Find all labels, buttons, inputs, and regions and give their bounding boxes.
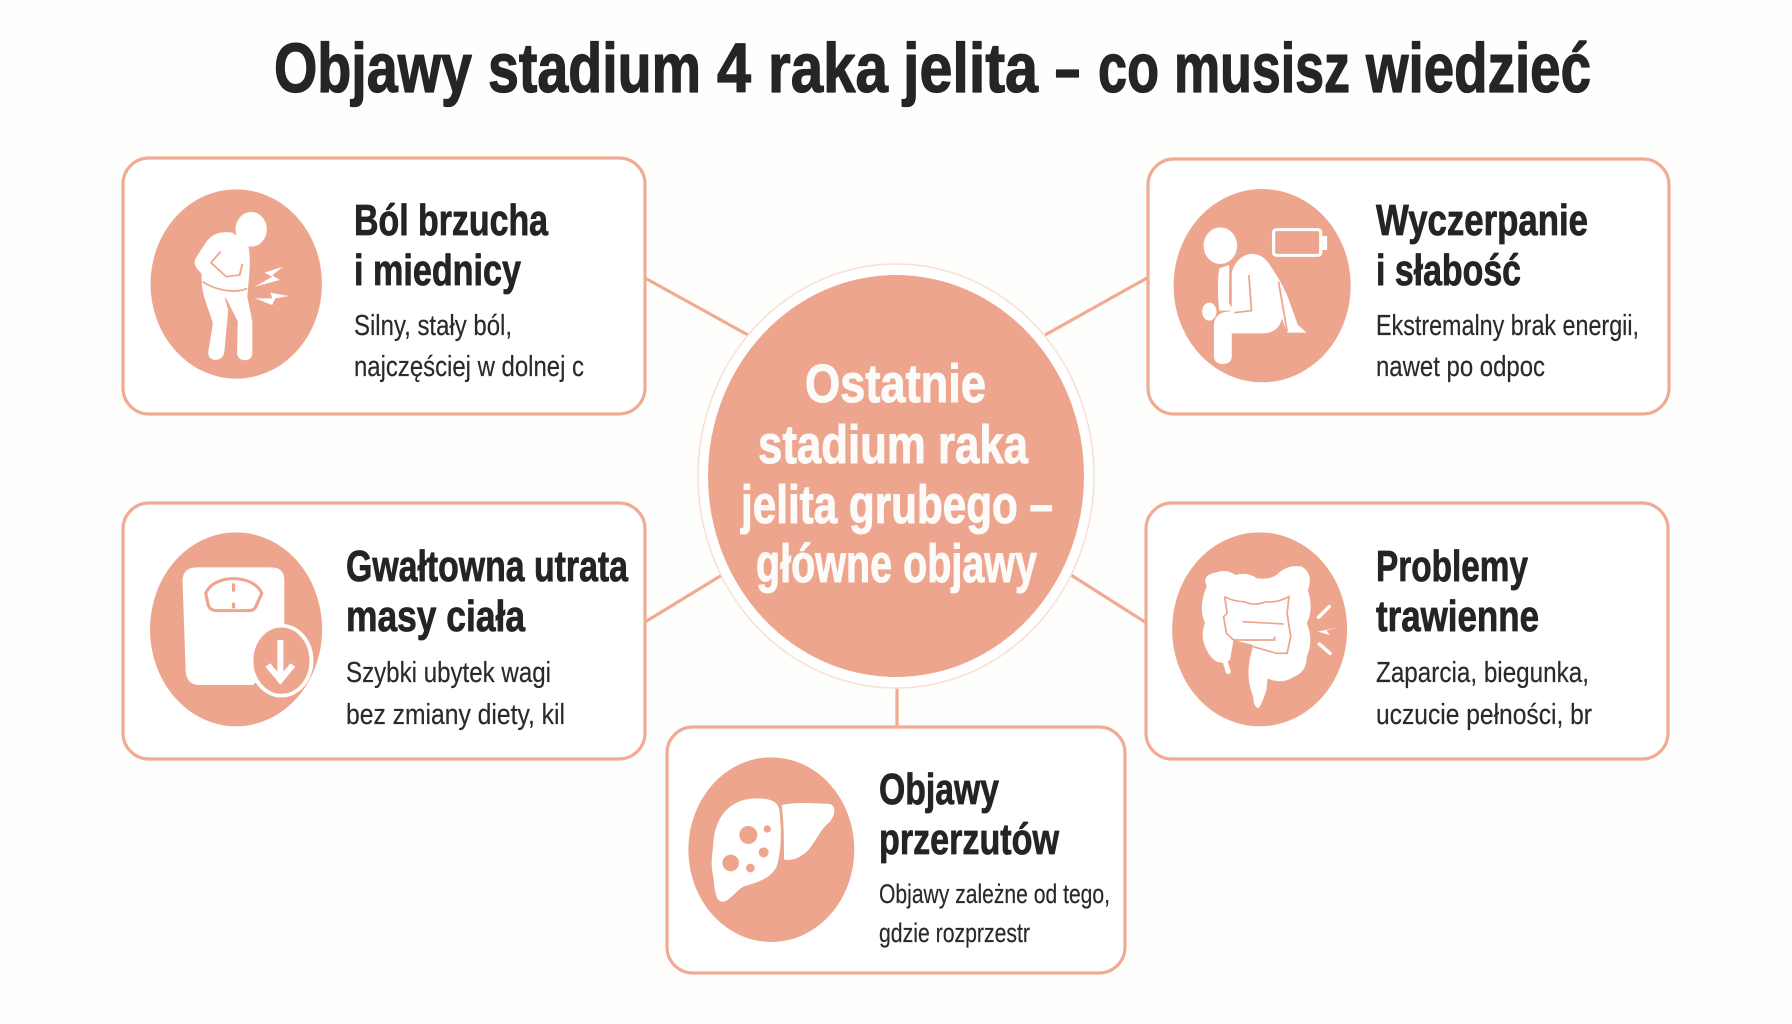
panel: digestive problems — [1146, 503, 1668, 759]
panel: rapid weight loss: bez zmiany diety, kil — [346, 699, 565, 731]
connectors between center circle and cards — [645, 278, 1147, 727]
title: – — [1055, 29, 1080, 107]
panel: abdominal and pelvic pain: i miednicy — [354, 246, 521, 295]
panel: digestive problems: uczucie pełności, br — [1376, 699, 1592, 731]
heading: Ból brzucha — [354, 196, 548, 245]
center circle: główne objawy — [756, 534, 1037, 594]
panel: abdominal and pelvic pain: najczęściej w dolnej c — [354, 351, 584, 383]
title: 4 — [717, 29, 751, 107]
title: co — [1098, 29, 1159, 107]
description: Silny, stały ból, — [354, 310, 512, 342]
panel: metastasis symptoms — [667, 727, 1125, 973]
title: Objawy — [274, 29, 472, 107]
description: Zaparcia, biegunka, — [1376, 657, 1589, 689]
icon: bathroom scale with down arrow — [150, 532, 322, 726]
panel: rapid weight loss — [123, 503, 645, 759]
title: jelita — [901, 29, 1039, 107]
panel: digestive problems: trawienne — [1376, 592, 1539, 641]
center circle: stadium raka — [758, 415, 1029, 475]
icon: liver with spots — [688, 757, 854, 942]
panel: exhaustion and weakness: nawet po odpoc — [1376, 351, 1545, 383]
panel: exhaustion and weakness: i słabość — [1376, 246, 1521, 295]
heading: Wyczerpanie — [1376, 196, 1588, 245]
title — [274, 29, 1591, 107]
heading: Problemy — [1376, 542, 1528, 591]
center circle — [698, 264, 1094, 688]
description: Objawy zależne od tego, — [879, 879, 1110, 909]
icon: person holding stomach — [151, 189, 322, 379]
panel: exhaustion and weakness — [1148, 159, 1669, 414]
title: musisz — [1174, 29, 1350, 107]
title: stadium — [488, 29, 701, 107]
heading: Gwałtowna utrata — [346, 542, 628, 591]
heading: Objawy — [879, 765, 999, 814]
center circle: Ostatnie — [805, 354, 986, 414]
panel: abdominal and pelvic pain — [123, 158, 645, 414]
title: wiedzieć — [1365, 29, 1591, 107]
panel: metastasis symptoms: przerzutów — [879, 815, 1060, 864]
description: Ekstremalny brak energii, — [1376, 310, 1639, 342]
center circle: jelita grubego – — [740, 475, 1053, 535]
panel: metastasis symptoms: gdzie rozprzestr — [879, 918, 1030, 948]
title: raka — [768, 29, 889, 107]
icon: tired seated person with low battery — [1174, 189, 1351, 382]
panel: rapid weight loss: masy ciała — [346, 592, 525, 641]
icon: large intestine — [1172, 532, 1347, 726]
description: Szybki ubytek wagi — [346, 657, 551, 689]
